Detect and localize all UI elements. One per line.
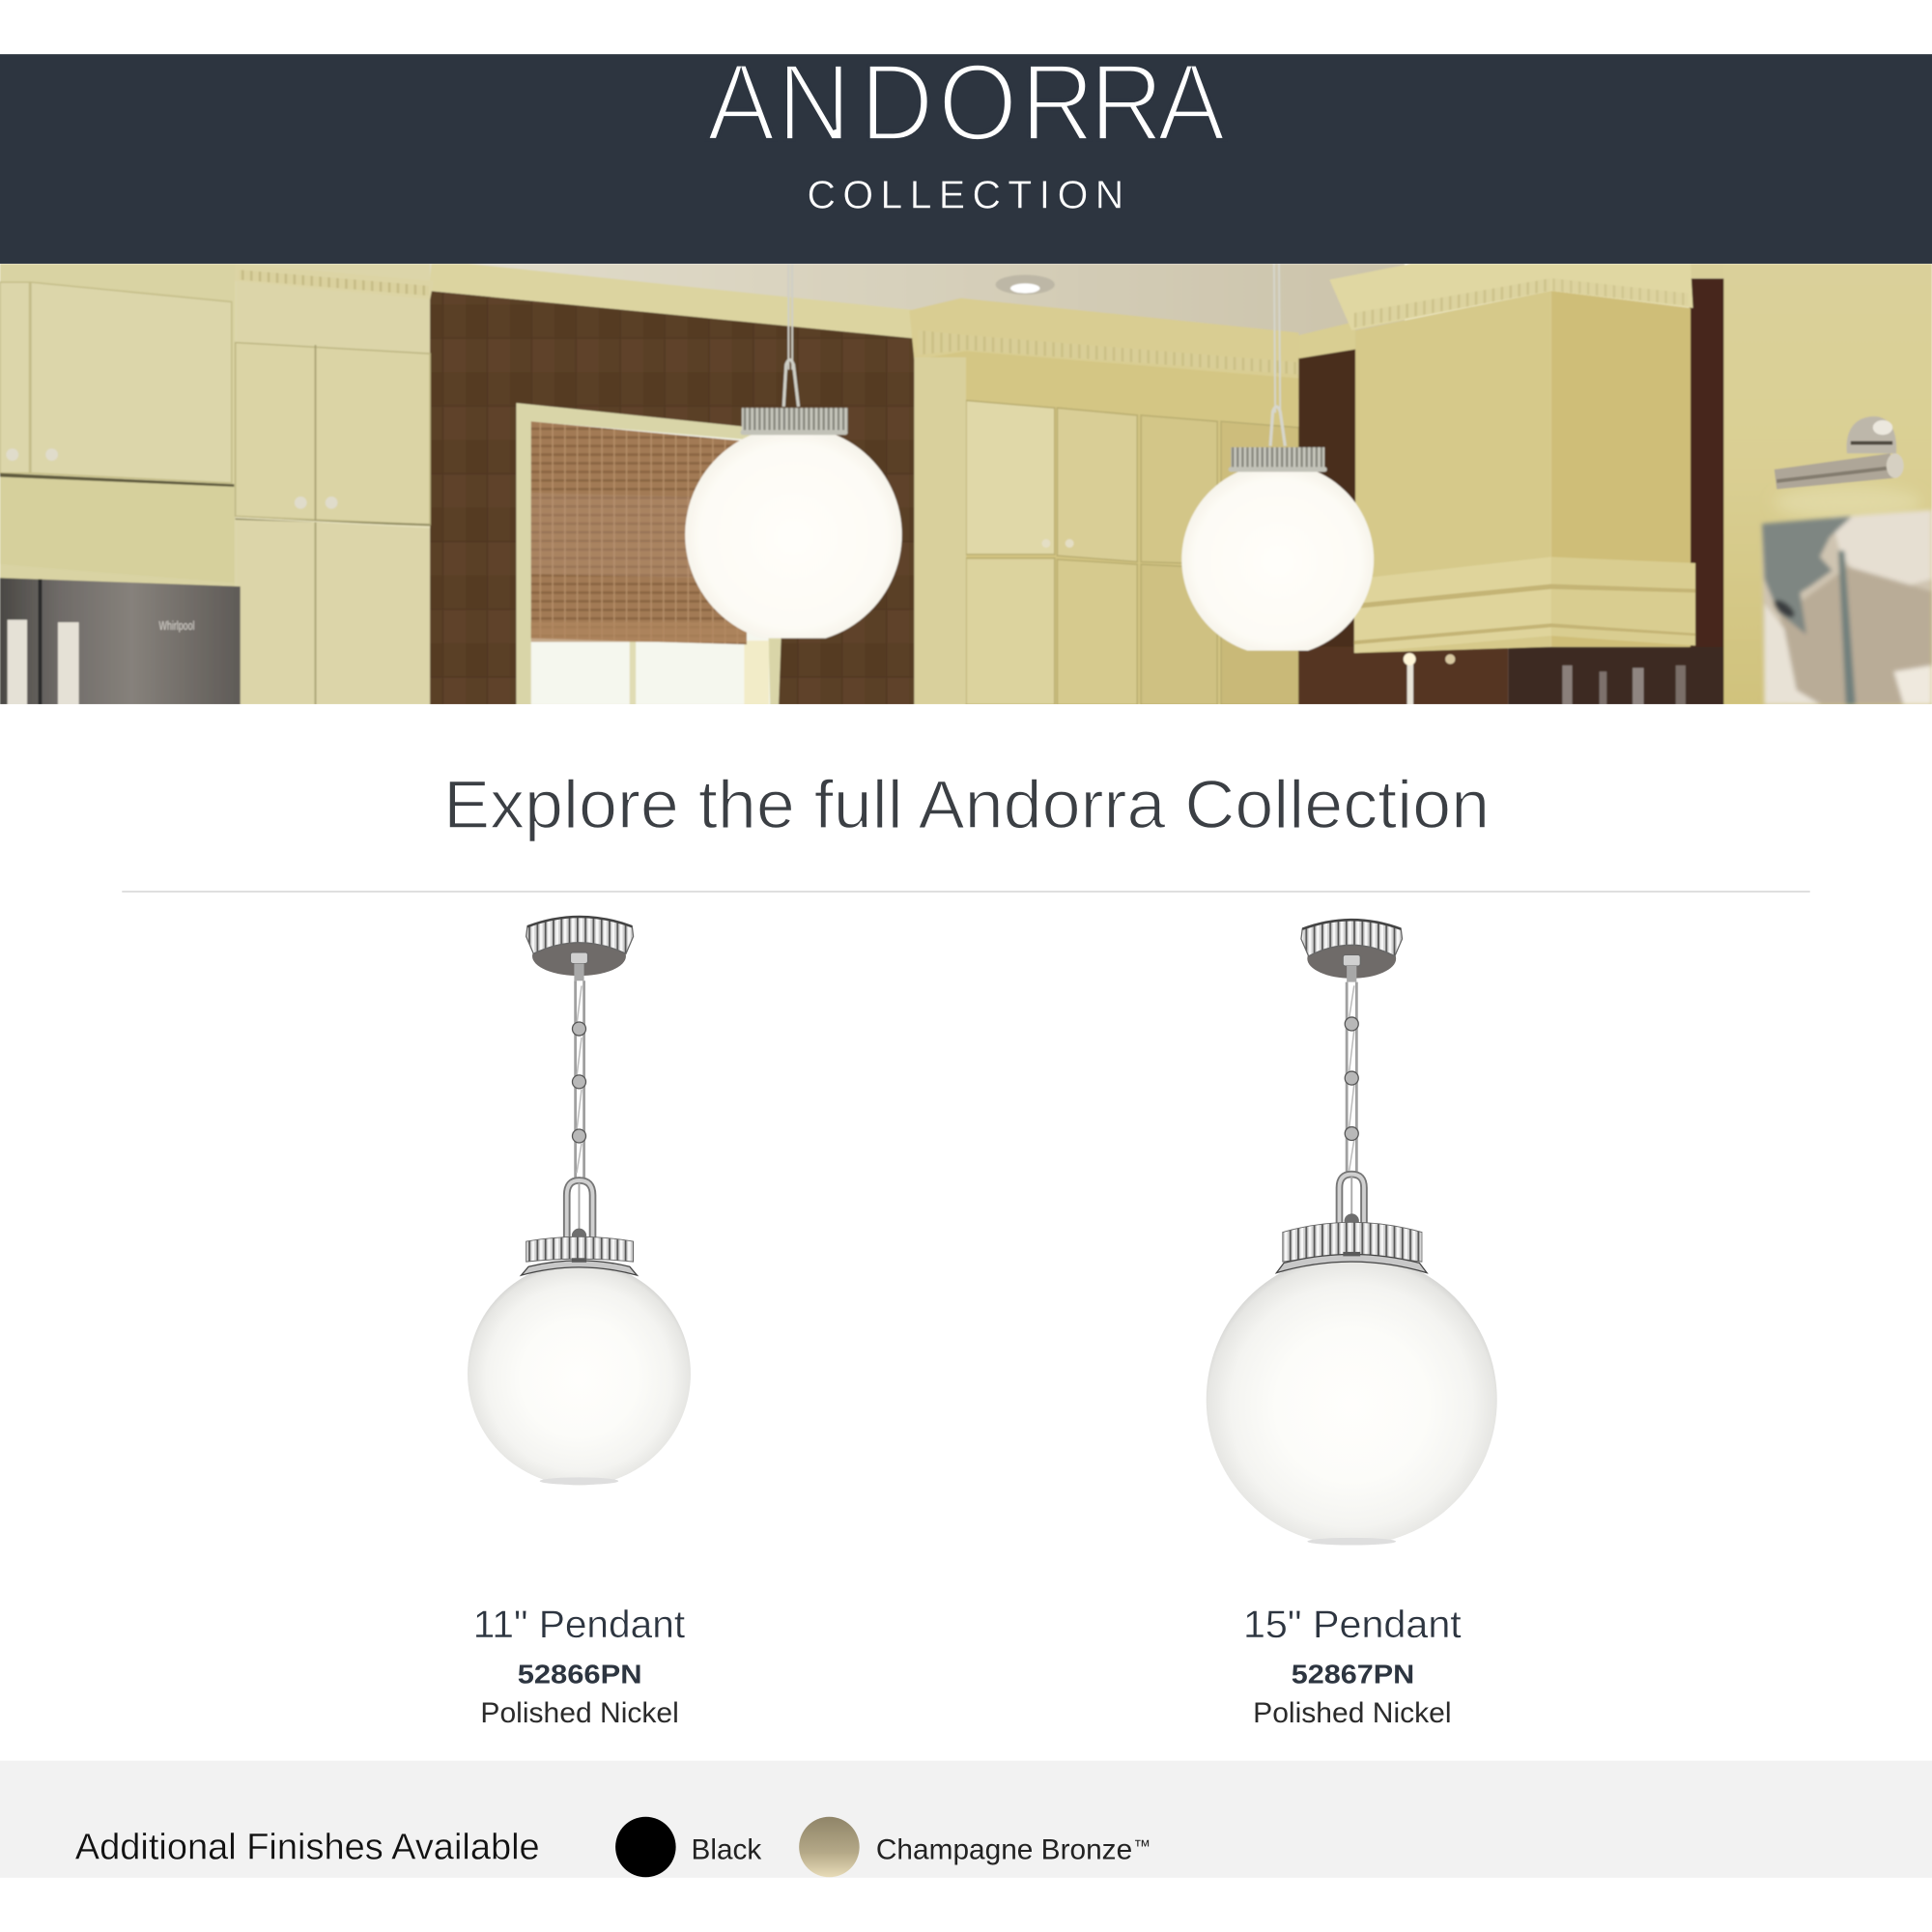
swatch: champagne bronze — [799, 1817, 860, 1877]
additional finishes band — [0, 1761, 1932, 1878]
pendant image 15 inch — [1207, 920, 1497, 1545]
range hood — [1329, 264, 1695, 653]
kitchen photo — [0, 264, 1932, 705]
name: 11 inch pendant: 11" Pendant — [473, 1603, 685, 1646]
dark wall beside hood — [1298, 349, 1358, 705]
header band — [0, 42, 1932, 264]
pendant image 11 inch — [468, 917, 691, 1486]
crown beside hood — [1298, 322, 1355, 358]
left crown molding — [429, 264, 918, 339]
section heading: Explore the full Andorra Collection — [443, 766, 1490, 842]
finish: polished nickel: Polished Nickel — [480, 1697, 679, 1729]
pendant 2 in room — [1181, 264, 1374, 650]
title: ANDORRA: ANDORRA — [707, 42, 1225, 164]
finish name: black: Black — [692, 1834, 762, 1866]
window with bamboo blind — [516, 403, 788, 705]
pendant 1 in room — [685, 264, 902, 639]
sku: 52866PN: 52866PN — [518, 1659, 642, 1689]
swatch: black — [615, 1817, 676, 1877]
finish name: champagne bronze: ™ — [1133, 1836, 1151, 1856]
brown tiled wall — [429, 291, 914, 705]
label: additional finishes: Additional Finishes Available — [75, 1827, 540, 1867]
product: 15 inch pendant — [1207, 920, 1497, 1729]
sku: 52867PN: 52867PN — [1292, 1659, 1414, 1689]
recessed ceiling light — [996, 274, 1055, 295]
finish name: champagne bronze: Champagne Bronze — [876, 1834, 1132, 1866]
wall sconce — [1775, 416, 1904, 489]
subtitle: COLLECTION: COLLECTION — [807, 173, 1123, 217]
dark wall right of hood — [1690, 278, 1726, 705]
product: 11 inch pendant — [468, 917, 691, 1729]
hood backsplash — [1298, 647, 1725, 705]
ceiling — [419, 264, 1405, 399]
finish: polished nickel: Polished Nickel — [1253, 1697, 1452, 1729]
sconce glow on wall — [1775, 486, 1922, 520]
right wall — [1723, 264, 1932, 705]
refrigerator logo: Whirlpool — [159, 618, 195, 633]
refrigerator — [0, 578, 241, 705]
name: 15 inch pendant: 15" Pendant — [1243, 1603, 1462, 1646]
left upper cabinets — [0, 264, 236, 586]
tall cabinets — [236, 264, 434, 705]
painting — [1762, 510, 1932, 705]
middle cabinets — [909, 298, 1298, 705]
